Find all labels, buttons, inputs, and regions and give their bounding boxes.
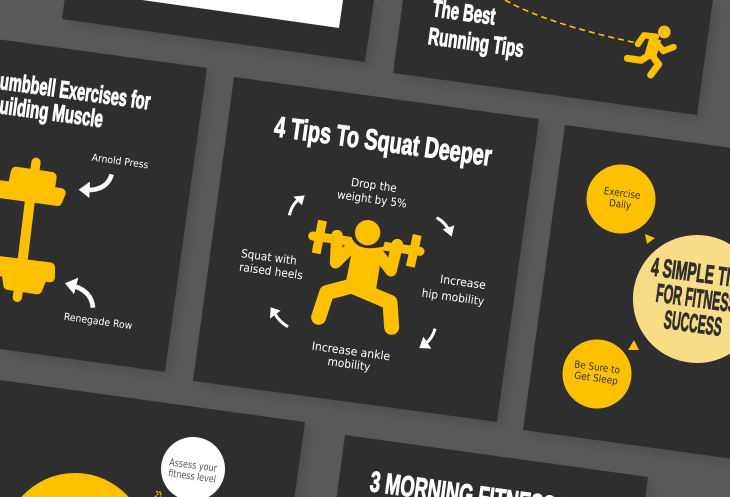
- label: hip mobility: Increase: [439, 272, 487, 292]
- arrowhead: upper: [645, 234, 655, 244]
- circle: main title: [633, 235, 730, 363]
- arrow: renegade row: [65, 278, 93, 308]
- label: renegade row: Renegade Row: [63, 312, 133, 332]
- label: drop the weight: weight by 5%: [336, 187, 408, 211]
- arrow: arnold press: [79, 174, 112, 198]
- label: ankle mobility: [311, 339, 391, 374]
- panel: top left card: [62, 0, 374, 62]
- label: raised heels: raised heels: [238, 260, 304, 282]
- icon: dumbbell: [0, 162, 61, 297]
- label: ankle mobility: Increase ankle: [311, 339, 391, 363]
- circle: exercise daily: [586, 164, 656, 234]
- icon: squatting lifter: [313, 220, 420, 327]
- arrowhead: lower: [628, 340, 639, 350]
- label: raised heels: Squat with: [240, 246, 298, 268]
- label: hip mobility: [421, 272, 487, 308]
- heading: dumbbell exercises: [0, 67, 152, 133]
- panel: fitness success: [523, 125, 730, 458]
- circle: exercise daily: Daily: [608, 198, 632, 212]
- heading: running tips: [427, 0, 525, 63]
- circle: assess fitness: Assess your: [168, 457, 218, 475]
- arrow: top left: [289, 195, 305, 215]
- label: drop the weight: Drop the: [350, 175, 398, 195]
- panel: dumbbell exercises: [0, 40, 207, 372]
- label: arnold press: Arnold Press: [91, 153, 149, 171]
- arrow: top right: [437, 218, 454, 237]
- heading: squat tips: 4 Tips To Squat Deeper: [272, 111, 494, 173]
- circle: sleep: Get Sleep: [573, 371, 619, 387]
- icon: runner: [627, 26, 674, 75]
- label: raised heels: [238, 246, 304, 282]
- circle: sleep: Be Sure to: [573, 359, 621, 377]
- panel: squat tips: [193, 77, 539, 422]
- panel: running tips: [393, 0, 713, 115]
- label: drop the weight: [336, 175, 408, 211]
- circle: assess fitness: [161, 437, 225, 497]
- panel: morning fitness: [337, 435, 648, 497]
- circle: assess fitness: fitness level: [167, 468, 217, 486]
- arrow: bottom left: [270, 307, 288, 327]
- white image block: [142, 0, 343, 28]
- panel: bottom left card: [0, 380, 305, 497]
- arrow: bottom right: [419, 329, 435, 349]
- label: hip mobility: hip mobility: [421, 286, 485, 308]
- circle: exercise daily: Exercise: [603, 186, 641, 202]
- small arrow: [155, 492, 161, 497]
- circle: yellow: [21, 473, 129, 497]
- circle: sleep: [562, 340, 632, 408]
- heading: running tips: Running Tips: [427, 23, 525, 63]
- label: ankle mobility: mobility: [327, 354, 371, 374]
- dashed running path: [505, 0, 637, 43]
